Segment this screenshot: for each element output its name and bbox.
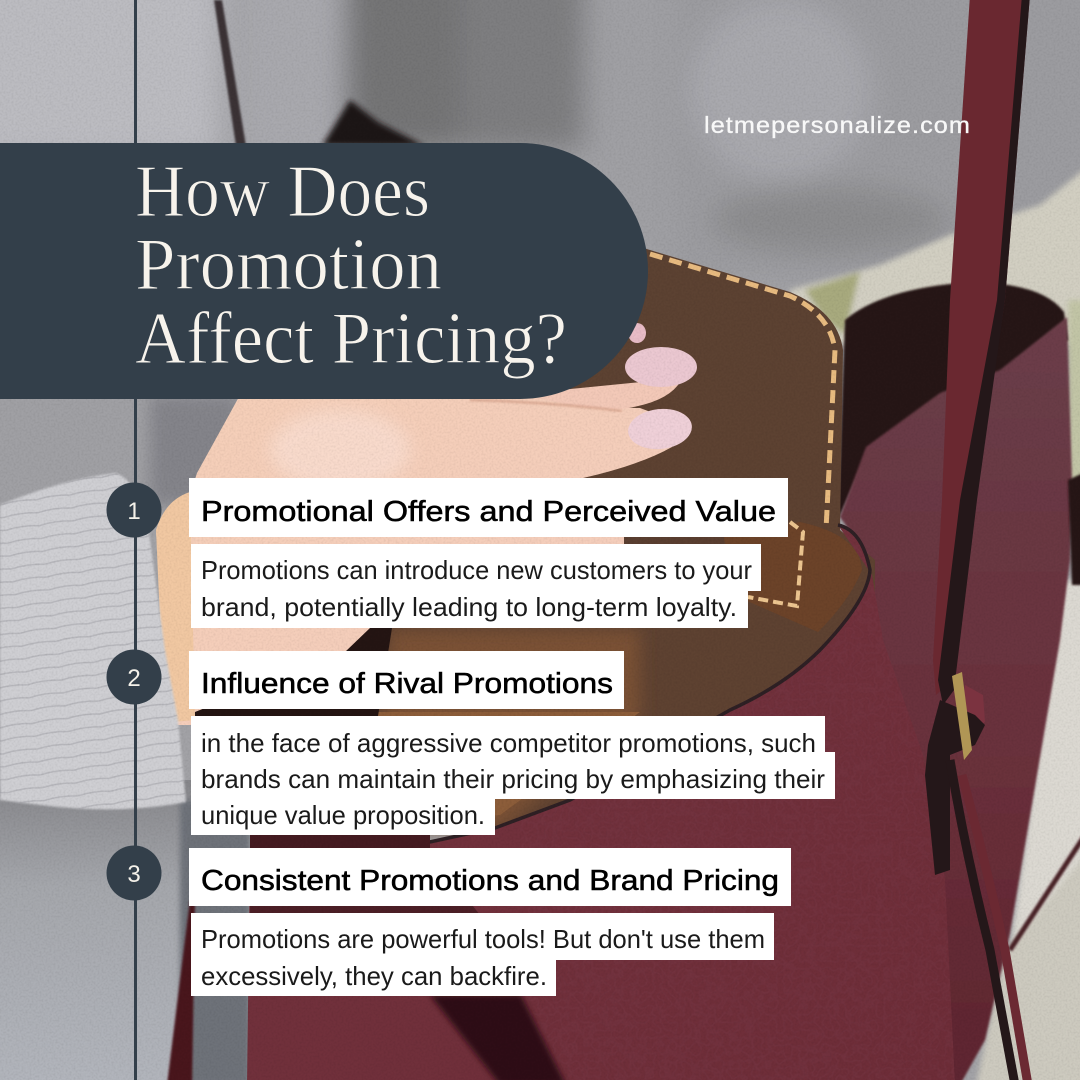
body text 3: Promotions are powerful tools! But don't use them xyxy=(201,924,765,954)
item 1 xyxy=(106,478,788,628)
heading 3: Consistent Promotions and Brand Pricing xyxy=(201,865,779,897)
title: How Does Promotion Affect Pricing? xyxy=(135,151,567,380)
photo: bag back panel xyxy=(840,317,1072,1080)
photo: dark strap at right edge xyxy=(1010,470,1080,950)
photo: bag rim xyxy=(425,525,870,843)
title: How Does Promotion Affect Pricing?: Promotion xyxy=(135,224,442,306)
photo: upper sweater xyxy=(0,0,1080,280)
number badge 1: 1 xyxy=(127,498,141,525)
photo: sweater dark gap xyxy=(322,100,425,146)
photo: shoulder strap and buckle xyxy=(925,0,1030,1080)
number badge 2: 2 xyxy=(127,665,141,692)
website label: letmepersonalize.com xyxy=(704,112,971,138)
number badge 1 xyxy=(106,482,162,538)
photo: fingernails xyxy=(625,323,697,452)
body text 1: Promotions can introduce new customers to your xyxy=(201,555,752,585)
photo: bag seam xyxy=(214,0,246,146)
body text 2: in the face of aggressive competitor promotions, such xyxy=(201,728,816,758)
timeline line xyxy=(134,0,137,1080)
photo: bag front panel xyxy=(247,525,955,1080)
item 2 xyxy=(106,650,835,835)
photo: blurred background at right xyxy=(790,165,1080,1080)
title banner xyxy=(0,143,648,399)
photo: leather pebble texture xyxy=(520,530,960,1080)
heading 1 xyxy=(189,478,788,537)
number badge 2 xyxy=(106,650,162,704)
heading 2: Influence of Rival Promotions xyxy=(201,668,613,700)
body text 2: brands can maintain their pricing by emphasizing their xyxy=(201,764,825,794)
body text 3 xyxy=(191,913,774,996)
photo: hand xyxy=(156,323,697,725)
number badge 3: 3 xyxy=(127,861,141,888)
photo: upper finger xyxy=(540,378,682,409)
photo: dark fold xyxy=(430,995,566,1080)
heading 1: Promotional Offers and Perceived Value xyxy=(201,496,776,528)
body text 3: excessively, they can backfire. xyxy=(201,961,547,991)
photo: bag inner xyxy=(838,283,1068,520)
photo: dark band between panels xyxy=(250,905,480,915)
heading 2 xyxy=(189,651,624,709)
title: How Does Promotion Affect Pricing?: How Does xyxy=(135,151,430,233)
number badge 3 xyxy=(106,846,162,900)
photo: sleeve cuff xyxy=(0,473,186,809)
photo: lower left sweater xyxy=(0,395,250,1080)
photo: wallet xyxy=(360,235,875,835)
body text 2 xyxy=(191,716,835,835)
body text 1: brand, potentially leading to long-term loyalty. xyxy=(201,592,737,622)
heading 3 xyxy=(189,848,791,906)
photo: shaded band under rim xyxy=(250,835,430,850)
body text 1 xyxy=(191,544,761,628)
title: How Does Promotion Affect Pricing?: Affect Pricing? xyxy=(135,298,567,380)
body text 2: unique value proposition. xyxy=(201,800,485,830)
item 3 xyxy=(106,846,791,996)
